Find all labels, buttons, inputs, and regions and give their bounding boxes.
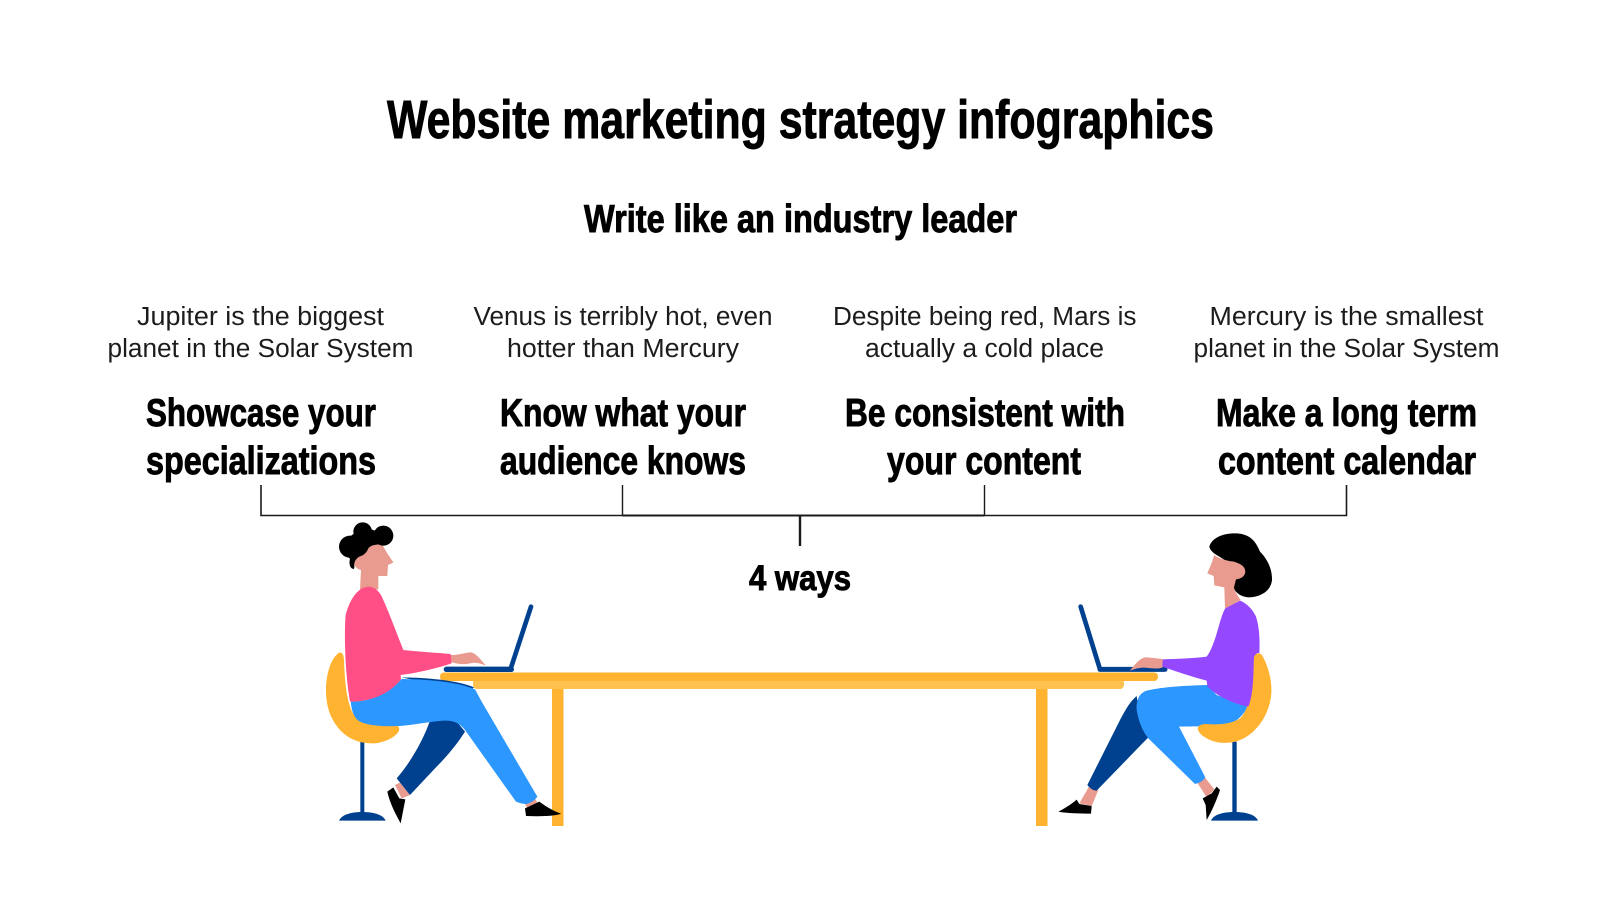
woman's back leg xyxy=(1058,696,1148,814)
column 2 heading xyxy=(500,392,746,483)
column 4 heading: content calendar xyxy=(1218,440,1476,483)
column 4 heading xyxy=(1216,392,1477,483)
column 3 description: Despite being red, Mars is xyxy=(833,303,1136,331)
woman's front leg xyxy=(1137,685,1248,820)
connector bracket xyxy=(261,485,1346,546)
figure: man with laptop xyxy=(326,522,561,823)
man's chair xyxy=(326,653,399,821)
woman's purple sweater xyxy=(1162,601,1260,707)
column 2 heading: audience knows xyxy=(500,440,746,483)
woman's chair xyxy=(1211,742,1258,821)
man's pink sweater xyxy=(345,587,452,702)
column 4 description xyxy=(1194,303,1500,363)
column 4: make a long term content calendar xyxy=(1194,303,1500,483)
man's back leg xyxy=(387,720,465,823)
man's front leg xyxy=(351,677,561,816)
title: Website marketing strategy infographics xyxy=(387,90,1214,150)
column 3 heading: your content xyxy=(887,440,1081,483)
column 2: know what your audience knows xyxy=(474,303,772,483)
column 4 description: Mercury is the smallest xyxy=(1210,303,1484,331)
woman's head and neck xyxy=(1207,555,1245,609)
column 2 description: hotter than Mercury xyxy=(507,335,739,363)
column 1 heading: specializations xyxy=(146,440,376,483)
column 1 description xyxy=(108,303,414,363)
subtitle: Write like an industry leader xyxy=(584,198,1017,241)
column 3 description xyxy=(833,303,1136,363)
column 1 description: Jupiter is the biggest xyxy=(137,303,384,331)
column 2 description xyxy=(474,303,772,363)
column 3 heading: Be consistent with xyxy=(845,392,1125,435)
woman's hair xyxy=(1209,533,1272,597)
man's hand xyxy=(450,652,486,666)
table xyxy=(440,672,1158,826)
figure: woman with laptop xyxy=(1058,533,1272,821)
man's laptop xyxy=(446,607,531,669)
woman's laptop xyxy=(1081,607,1165,669)
column 3 heading xyxy=(845,392,1125,483)
column 3 description: actually a cold place xyxy=(865,335,1104,363)
column 2 description: Venus is terribly hot, even xyxy=(474,303,772,331)
column 1 heading xyxy=(146,392,376,483)
column 2 heading: Know what your xyxy=(500,392,746,435)
column 1: showcase your specializations xyxy=(108,303,414,483)
man's head and neck xyxy=(339,522,393,590)
column 3: be consistent with your content xyxy=(833,303,1136,483)
column 1 description: planet in the Solar System xyxy=(108,335,414,363)
column 1 heading: Showcase your xyxy=(146,392,376,435)
column 4 description: planet in the Solar System xyxy=(1194,335,1500,363)
center label: 4 ways: 4 ways xyxy=(749,559,851,598)
woman's hand xyxy=(1130,657,1163,671)
woman's chair seat xyxy=(1198,653,1271,743)
column 4 heading: Make a long term xyxy=(1216,392,1477,435)
